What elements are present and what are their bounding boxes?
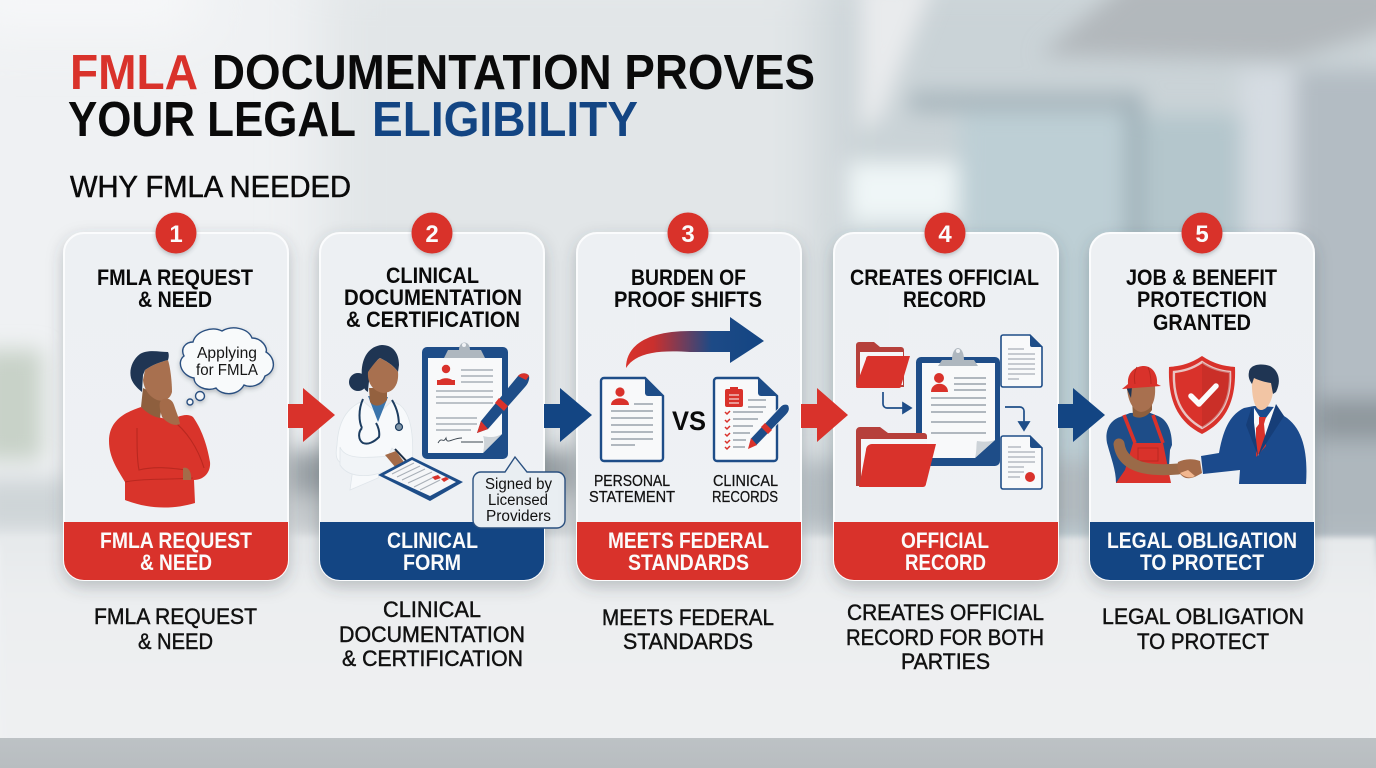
callout: signed by licensed providers: Licensed (488, 492, 548, 509)
arrow: step 1 to 2 (288, 388, 335, 442)
card heading: & CERTIFICATION (346, 307, 520, 332)
icon: businessman (1201, 364, 1306, 484)
label: vs: VS (672, 406, 706, 436)
step badge: 5 (1195, 221, 1209, 248)
comparison labels (589, 473, 778, 506)
footer label (901, 528, 989, 575)
icon: personal statement document (601, 378, 663, 461)
card heading: CREATES OFFICIAL (850, 265, 1039, 290)
icon: pen (477, 373, 529, 433)
step badge (924, 212, 966, 254)
caption: step 2 (339, 597, 525, 671)
caption: step 3: MEETS FEDERAL (602, 605, 774, 630)
card heading: & NEED (138, 287, 212, 312)
footer label (608, 528, 769, 575)
icon: protection shield (1169, 356, 1235, 434)
card footer (320, 522, 544, 580)
step badge (156, 212, 196, 254)
caption: step 5: LEGAL OBLIGATION (1102, 604, 1304, 629)
card heading: DOCUMENTATION (344, 285, 522, 310)
icon: thinking person (109, 351, 210, 508)
callout text: for FMLA (196, 362, 258, 379)
title: ELIGIBILITY (372, 93, 638, 147)
card footer (1090, 522, 1314, 580)
card heading: RECORD (903, 287, 986, 312)
panel: step 2 (320, 212, 565, 580)
card heading (97, 265, 254, 312)
comparison labels: STATEMENT (589, 489, 675, 506)
icon: top document (1001, 335, 1042, 387)
card heading: FMLA REQUEST (97, 265, 254, 290)
footer label: MEETS FEDERAL (608, 528, 769, 553)
comparison labels: PERSONAL (594, 473, 670, 490)
footer label: CLINICAL (387, 528, 478, 553)
icon: doctor (336, 345, 413, 490)
arrow: folder to clipboard (883, 392, 911, 413)
card heading (614, 265, 762, 312)
caption: step 2: & CERTIFICATION (342, 646, 523, 671)
caption: step 5 (1102, 604, 1304, 654)
title (68, 46, 815, 147)
footer label: TO PROTECT (1140, 550, 1264, 575)
callout: signed by licensed providers: Signed by (485, 476, 552, 493)
icon: large red folder (856, 427, 936, 487)
icon: worker (1106, 366, 1178, 483)
icon: small clipboard (378, 457, 463, 501)
card heading: PROTECTION (1137, 287, 1267, 312)
footer label (1107, 528, 1297, 575)
arrow: clipboard to document (1005, 407, 1029, 430)
card heading (1126, 265, 1277, 335)
card heading (850, 265, 1039, 312)
footer label: OFFICIAL (901, 528, 989, 553)
caption: step 3 (602, 605, 774, 654)
footer label (387, 528, 478, 575)
footer label: FORM (403, 550, 461, 575)
title: DOCUMENTATION PROVES (212, 46, 815, 100)
card heading: JOB & BENEFIT (1126, 265, 1277, 290)
icon: clipboard record (916, 348, 1000, 466)
footer label: RECORD (905, 550, 986, 575)
footer label (100, 528, 252, 575)
card body (320, 233, 544, 580)
card body (64, 233, 288, 580)
footer label: FMLA REQUEST (100, 528, 252, 553)
callout text (196, 345, 258, 379)
panel: step 1 (64, 212, 288, 580)
icon: certification clipboard (422, 342, 508, 459)
callout: signed by licensed providers (473, 457, 565, 528)
caption: step 2: CLINICAL (383, 597, 481, 622)
card body (834, 233, 1058, 580)
card heading: GRANTED (1153, 310, 1251, 335)
step badge (412, 212, 452, 254)
caption: step 4: PARTIES (901, 649, 990, 674)
step badge (1182, 212, 1222, 254)
caption: step 1: FMLA REQUEST (94, 604, 257, 629)
card heading: BURDEN OF (631, 265, 746, 290)
caption: step 4: RECORD FOR BOTH (846, 625, 1044, 650)
icon: pen (748, 404, 789, 449)
icon: clinical records document (714, 378, 777, 461)
arrow: burden shift (626, 317, 764, 368)
arrow: step 4 to 5 (1058, 388, 1105, 442)
title: YOUR LEGAL (68, 93, 356, 147)
caption: step 4 (846, 600, 1044, 674)
card footer (834, 522, 1058, 580)
subtitle: WHY FMLA NEEDED (70, 169, 351, 204)
card footer (64, 522, 288, 580)
caption: step 4: CREATES OFFICIAL (847, 600, 1044, 625)
footer label: & NEED (140, 550, 212, 575)
arrow: step 3 to 4 (801, 388, 848, 442)
callout text: Applying (197, 345, 257, 362)
caption: step 1 (94, 604, 257, 654)
step badge: 1 (169, 221, 183, 248)
card footer (577, 522, 801, 580)
caption: step 2: DOCUMENTATION (339, 622, 525, 647)
callout: thought bubble (180, 328, 273, 405)
step badge: 4 (938, 221, 952, 248)
card heading: CLINICAL (386, 263, 479, 288)
arrow: step 2 to 3 (544, 388, 592, 442)
panel: step 5 (1090, 212, 1314, 580)
footer label: STANDARDS (628, 550, 749, 575)
caption: step 3: STANDARDS (623, 629, 753, 654)
step badge: 3 (681, 221, 695, 248)
panel: step 4 (834, 212, 1058, 580)
comparison labels: CLINICAL (713, 473, 778, 490)
caption: step 5: TO PROTECT (1137, 629, 1269, 654)
card heading: PROOF SHIFTS (614, 287, 762, 312)
panel: step 3 (577, 212, 801, 580)
icon: handshake (1177, 459, 1202, 478)
icon: small red folder (856, 342, 910, 388)
title: FMLA (70, 46, 198, 100)
callout: signed by licensed providers: Providers (486, 508, 551, 525)
card body (577, 233, 801, 580)
caption: step 1: & NEED (138, 629, 213, 654)
icon: bottom document with seal (1001, 436, 1042, 489)
step badge: 2 (425, 221, 439, 248)
card heading (344, 263, 522, 332)
footer label: LEGAL OBLIGATION (1107, 528, 1297, 553)
card body (1090, 233, 1314, 580)
comparison labels: RECORDS (712, 489, 778, 506)
step badge (668, 212, 708, 254)
